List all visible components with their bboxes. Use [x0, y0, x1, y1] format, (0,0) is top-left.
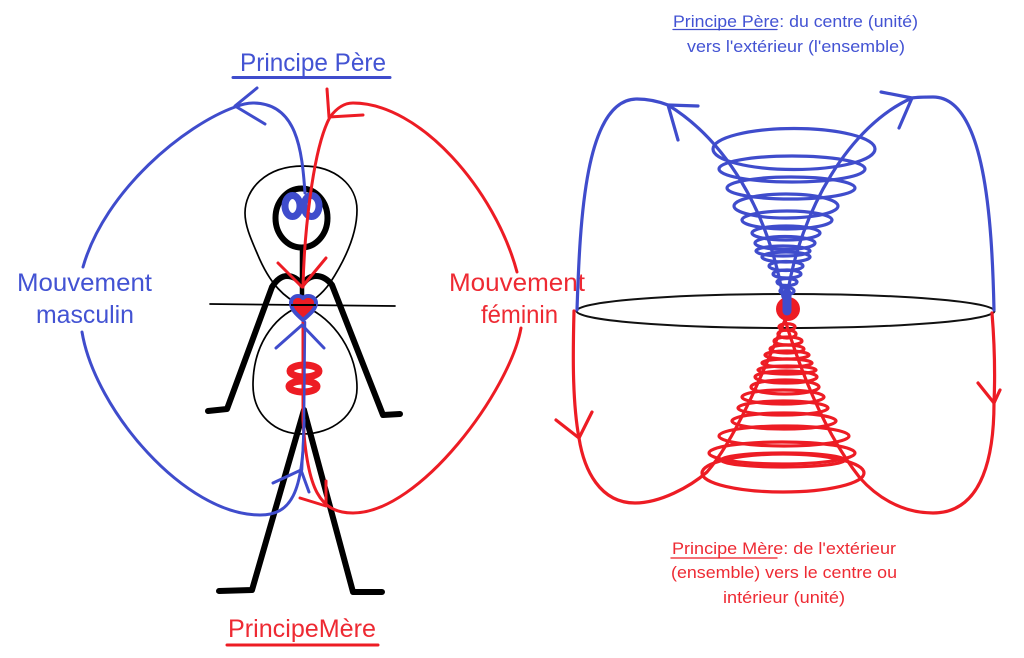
thin energy field loops and horizon line: [210, 166, 395, 434]
label: Mouvement féminin: féminin: [481, 301, 558, 329]
horizon ellipse: [576, 294, 994, 328]
red feminine movement loop with arrows: [300, 89, 521, 513]
blue masculine movement loop with arrows: [82, 88, 309, 515]
label: Mouvement masculin: [17, 269, 152, 329]
text: Principe Mère description: (ensemble) vers le centre ou: [671, 563, 897, 582]
blue line through lower body: [302, 322, 305, 470]
label: Mouvement féminin: [449, 269, 585, 329]
label: Mouvement masculin: Mouvement: [17, 269, 152, 297]
text: Principe Père description: [673, 12, 918, 56]
text: Principe Mère description: intérieur (unité): [723, 588, 845, 607]
blue chevron below heart: [276, 325, 324, 348]
heading: Principe Mère: PrincipeMère: [228, 615, 376, 643]
blue head symbol: [285, 196, 319, 216]
text: Principe Père description: Principe Père: du centre (unité): [673, 12, 918, 31]
blue upward vortex: [577, 92, 994, 311]
label: Mouvement féminin: Mouvement: [449, 269, 585, 297]
label: Mouvement masculin: masculin: [36, 301, 134, 329]
red chevron above heart: [278, 258, 326, 287]
heart centre: [291, 296, 316, 320]
text: Principe Mère description: [671, 539, 897, 607]
red centre dot: [776, 297, 800, 321]
red downward vortex: [556, 311, 1000, 513]
heading: Principe Père: Principe Père: [240, 49, 386, 77]
stick figure body: [208, 188, 400, 592]
text: Principe Père description: vers l'extérieur (l'ensemble): [687, 37, 905, 56]
red lower belly symbol: [289, 365, 319, 392]
text: Principe Mère description: Principe Mère: de l'extérieur: [672, 539, 896, 558]
